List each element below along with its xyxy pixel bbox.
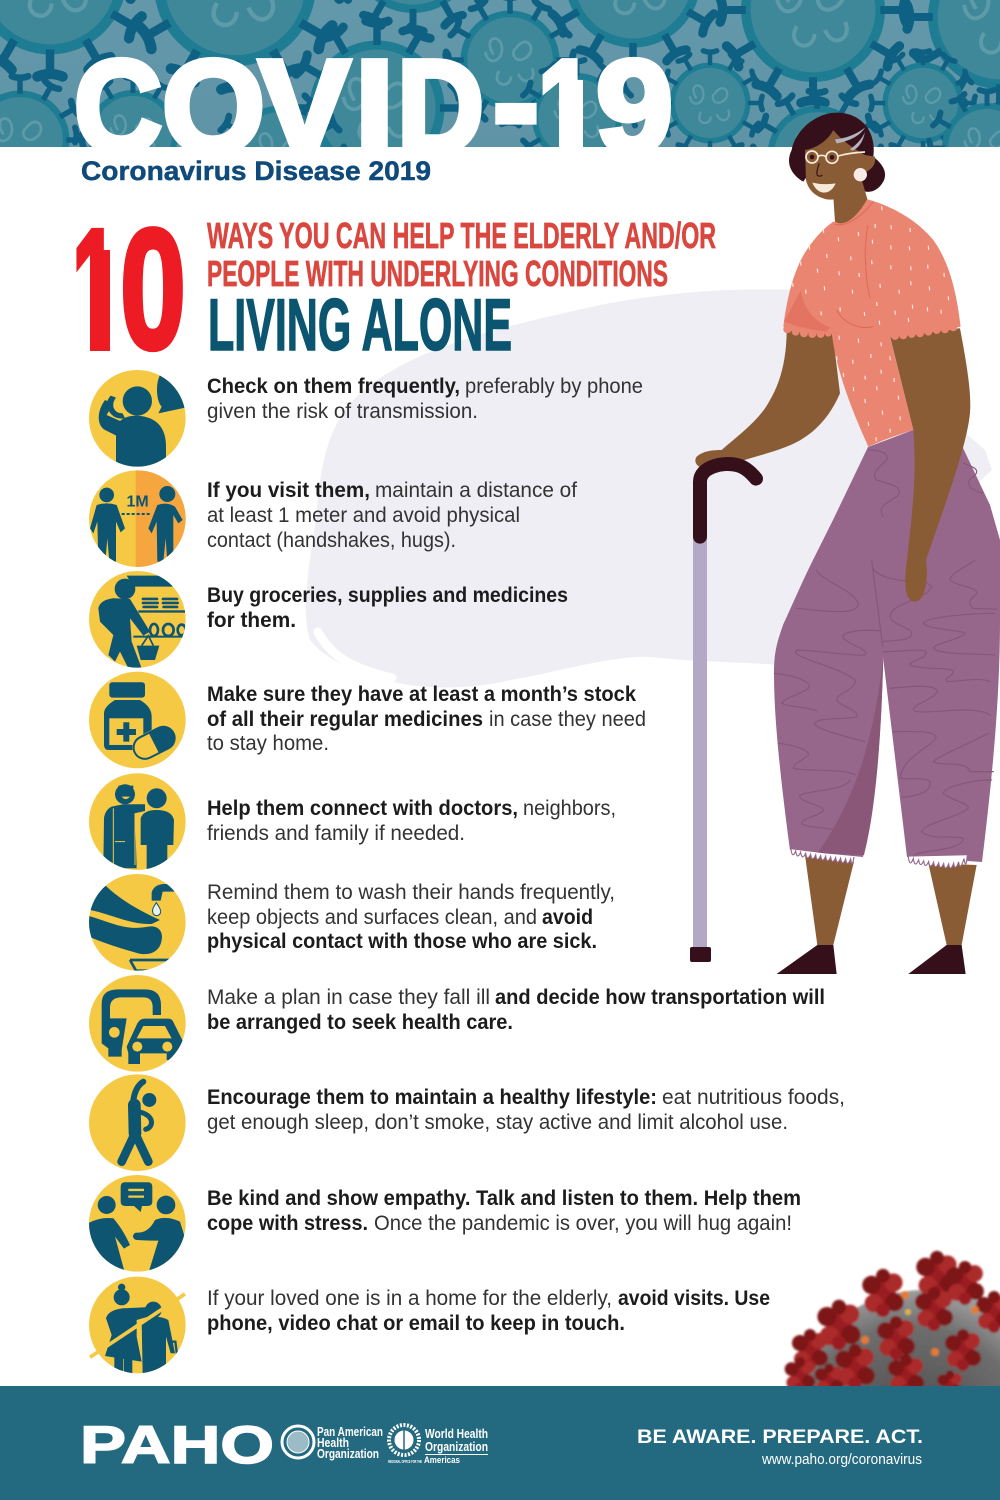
tip 4 text — [207, 683, 646, 755]
title: COVID-19 — [76, 56, 671, 147]
icon 3: grocery shopping — [89, 571, 190, 668]
coronavirus photo — [783, 1249, 1000, 1386]
subtitle: Coronavirus Disease 2019 — [81, 156, 431, 186]
tip 5 text: neighbors, — [523, 797, 616, 820]
WHO name: REGIONAL OFFICE FOR THE — [388, 1459, 422, 1464]
title: COVID-19: 9 — [596, 33, 673, 180]
tip 6 text: Remind them to wash their hands frequently, — [207, 881, 615, 904]
title: COVID-19: D — [397, 33, 484, 180]
tip 5 text: Help them connect with doctors, — [207, 797, 518, 820]
icon 6: hand washing — [85, 874, 186, 971]
PAHO name — [317, 1425, 383, 1461]
left arm and hand — [695, 330, 840, 468]
background blob — [306, 289, 992, 688]
big number 10: 0 — [120, 194, 186, 385]
shirt seam lines — [834, 202, 873, 327]
icon 5: doctor and patient — [89, 773, 186, 870]
heading line 2: PEOPLE WITH UNDERLYING CONDITIONS — [207, 253, 668, 294]
website: www.paho.org/coronavirus — [761, 1451, 922, 1468]
right arm — [890, 328, 970, 602]
cane tip — [690, 947, 711, 962]
tip 6 text — [207, 881, 615, 953]
tip 9 text: Be kind and show empathy. Talk and listen to them. Help them — [207, 1187, 801, 1210]
gray hair streaks — [835, 127, 865, 151]
icon 1: phone call — [89, 370, 190, 468]
tip 2 text — [207, 479, 577, 552]
earring — [854, 168, 867, 181]
tip 7 text: Make a plan in case they fall ill — [207, 986, 490, 1009]
tip 1 text: Check on them frequently, — [207, 375, 460, 398]
slogan: BE AWARE. PREPARE. ACT. — [637, 1426, 923, 1448]
PAHO emblem — [282, 1426, 314, 1458]
heading line 1: WAYS YOU CAN HELP THE ELDERLY AND/OR — [207, 215, 716, 256]
title: COVID-19: 1 — [538, 33, 594, 180]
shirt — [783, 199, 961, 447]
tip 7 text — [207, 986, 825, 1034]
tip 2 text: If you visit them, — [207, 479, 370, 502]
tip 3 text: for them. — [207, 609, 296, 632]
header virus pattern band — [0, 0, 1000, 147]
title: COVID-19: I — [355, 33, 394, 180]
WHO emblem — [389, 1425, 419, 1455]
tip 4 text: Make sure they have at least a month’s stock — [207, 683, 636, 706]
title: COVID-19: - — [493, 29, 539, 176]
title: COVID-19: V — [259, 33, 350, 180]
illustration: elderly woman with cane — [690, 113, 1000, 974]
tip 10 text: If your loved one is in a home for the elderly, — [207, 1287, 612, 1310]
tip 4 text: to stay home. — [207, 732, 329, 755]
hair back — [789, 113, 885, 192]
shirt scallops — [783, 323, 957, 340]
tip 7 text: and decide how transportation will — [495, 986, 825, 1009]
footer band — [0, 1386, 1000, 1500]
tip 9 text: cope with stress. — [207, 1212, 368, 1235]
tip 3 text — [207, 584, 568, 632]
tip 1 text: given the risk of transmission. — [207, 400, 478, 423]
tip 9 text: Once the pandemic is over, you will hug again! — [374, 1212, 792, 1235]
tip 4 text: of all their regular medicines — [207, 708, 483, 731]
heading: living alone: LIVING ALONE — [208, 285, 512, 366]
title: COVID-19: O — [162, 33, 265, 180]
tip 8 text: Encourage them to maintain a healthy lifestyle: — [207, 1086, 657, 1109]
trouser fold — [817, 657, 883, 855]
tip 10 text: avoid visits. Use — [618, 1287, 770, 1310]
trouser lace hems — [791, 849, 967, 868]
icon 10: no visits to care home — [89, 1277, 186, 1374]
tip 2 text: contact (handshakes, hugs). — [207, 529, 456, 552]
icon 2: one metre distance — [89, 468, 189, 568]
WHO name: Organization — [425, 1440, 488, 1454]
trouser pattern — [774, 560, 997, 855]
tip 3 text: Buy groceries, supplies and medicines — [207, 584, 568, 607]
tip 5 text — [207, 797, 616, 845]
tip 10 text: phone, video chat or email to keep in touch. — [207, 1312, 625, 1335]
tip 1 text: preferably by phone — [465, 375, 643, 398]
icon 4: medicine bottle and pill — [89, 672, 186, 768]
eyes — [810, 155, 814, 159]
tip 8 text — [207, 1086, 845, 1134]
sleeve shadow — [784, 291, 830, 332]
tip 6 text: physical contact with those who are sick. — [207, 930, 597, 953]
tip 10 text — [207, 1287, 770, 1335]
PAHO name: Pan American — [317, 1425, 383, 1439]
cane shaft — [693, 530, 707, 950]
face — [805, 130, 875, 200]
big number 10: 1 — [72, 194, 118, 385]
icon 9: two people talking — [88, 1175, 187, 1275]
nose — [817, 163, 822, 176]
tip 2 text: at least 1 meter and avoid physical — [207, 504, 520, 527]
PAHO name: Health — [317, 1436, 349, 1450]
PAHO name: Organization — [317, 1447, 379, 1461]
tip 1 text — [207, 375, 643, 423]
neck — [833, 173, 867, 223]
tip 6 text: keep objects and surfaces clean, and — [207, 906, 537, 929]
WHO name — [388, 1427, 488, 1466]
tip 2 text: maintain a distance of — [375, 479, 577, 502]
tip 6 text: avoid — [542, 906, 593, 929]
smile — [812, 183, 836, 193]
PAHO wordmark: PAHO — [80, 1416, 274, 1475]
big number 10 — [76, 226, 183, 352]
tip 7 text: be arranged to seek health care. — [207, 1011, 513, 1034]
tip 8 text: get enough sleep, don’t smoke, stay active and limit alcohol use. — [207, 1111, 788, 1134]
icon 7: bus and car — [89, 975, 186, 1072]
trouser pattern upper — [868, 450, 983, 517]
tip 4 text: in case they need — [489, 708, 646, 731]
icon 8: stretching figure — [89, 1074, 186, 1171]
shirt polka ticks — [793, 206, 949, 441]
cane handle — [700, 464, 756, 537]
title: COVID-19: C — [74, 33, 162, 180]
icon 2: one metre distance: 1M — [127, 493, 149, 510]
trousers — [774, 430, 1000, 862]
glasses — [806, 151, 865, 163]
WHO name: World Health — [425, 1427, 488, 1441]
lower legs — [805, 855, 977, 945]
WHO name: Americas — [424, 1455, 460, 1466]
shoes — [777, 945, 966, 974]
tip 5 text: friends and family if needed. — [207, 822, 465, 845]
tip 9 text — [207, 1187, 801, 1235]
tip 8 text: eat nutritious foods, — [662, 1086, 845, 1109]
